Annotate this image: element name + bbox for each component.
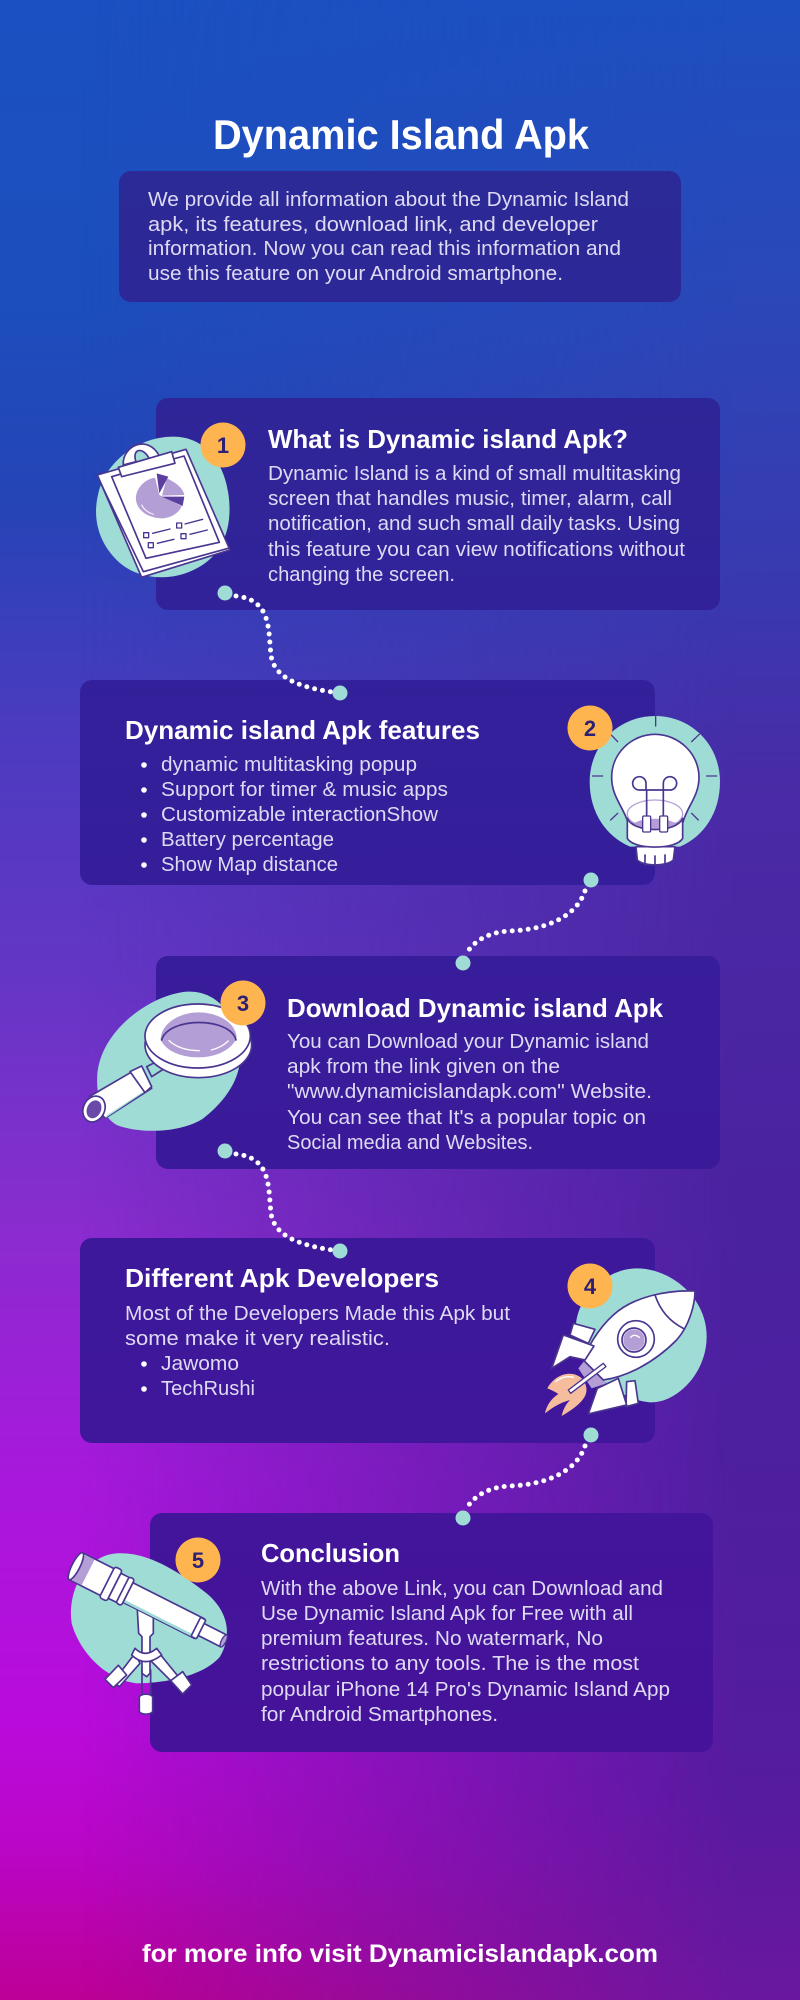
body: what is: notification, and such small daily tasks. Using	[268, 513, 680, 535]
badge: 2: 2	[584, 716, 596, 741]
body: developers: Most of the Developers Made this Apk but	[125, 1303, 510, 1325]
badge: 1	[200, 422, 246, 468]
body: download: Social media and Websites.	[287, 1132, 533, 1154]
badge: 2	[568, 706, 612, 750]
badge: 5	[176, 1538, 220, 1582]
intro text: information. Now you can read this information and	[148, 238, 621, 260]
connector: step 1 to 2	[218, 586, 348, 700]
panel: download	[156, 956, 720, 1169]
connector: step 3 to 4	[218, 1144, 348, 1258]
heading: developers: Different Apk Developers	[125, 1263, 439, 1293]
body: download: apk from the link given on the	[287, 1056, 560, 1078]
body: conclusion: With the above Link, you can Download and	[261, 1578, 663, 1600]
body: conclusion: restrictions to any tools. The is the most	[261, 1653, 639, 1675]
icon: rocket	[545, 1268, 707, 1416]
body: download	[287, 1031, 652, 1154]
body: conclusion	[261, 1578, 670, 1726]
intro text	[148, 189, 629, 285]
body: what is: changing the screen.	[268, 564, 455, 586]
heading: what is: What is Dynamic island Apk?	[268, 424, 628, 454]
feature list: Battery percentage	[161, 829, 334, 851]
icon: light bulb	[590, 716, 720, 865]
badge: 3	[220, 980, 266, 1026]
body: download: You can Download your Dynamic island	[287, 1031, 649, 1053]
body: developers	[125, 1303, 510, 1400]
badge: 4	[568, 1264, 612, 1308]
badge: 4: 4	[584, 1274, 597, 1299]
connector: step 4 to 5	[456, 1428, 598, 1526]
feature list: Customizable interactionShow	[161, 804, 439, 826]
body: what is	[268, 463, 685, 586]
heading: features: Dynamic island Apk features	[125, 715, 480, 745]
connector: step 2 to 3	[456, 872, 598, 970]
badge: 5: 5	[192, 1548, 204, 1573]
panel: features	[80, 680, 655, 885]
intro text: apk, its features, download link, and developer	[148, 214, 598, 236]
body: conclusion: premium features. No watermark, No	[261, 1628, 603, 1650]
body: conclusion: Use Dynamic Island Apk for Free with all	[261, 1603, 633, 1625]
body: what is: Dynamic Island is a kind of small multitasking	[268, 463, 681, 485]
intro text: We provide all information about the Dynamic Island	[148, 189, 629, 211]
intro text: use this feature on your Android smartphone.	[148, 263, 563, 285]
body: download: "www.dynamicislandapk.com" Website.	[287, 1081, 652, 1103]
body: download: You can see that It's a popular topic on	[287, 1107, 646, 1129]
panel: what is	[156, 398, 720, 610]
body: conclusion: for Android Smartphones.	[261, 1704, 498, 1726]
body: what is: this feature you can view notifications without	[268, 539, 685, 561]
footer: for more info visit Dynamicislandapk.com	[142, 1940, 658, 1968]
body: conclusion: popular iPhone 14 Pro's Dynamic Island App	[261, 1679, 670, 1701]
icon: magnifying glass	[79, 992, 252, 1131]
panel: intro	[119, 171, 681, 302]
heading: conclusion: Conclusion	[261, 1538, 400, 1568]
feature list: Show Map distance	[161, 854, 338, 876]
panel: developers	[80, 1238, 655, 1443]
icon: clipboard report	[96, 437, 230, 577]
heading: download: Download Dynamic island Apk	[287, 993, 664, 1023]
body: developers: Jawomo	[161, 1353, 239, 1375]
badge: 1: 1	[217, 433, 229, 458]
body: what is: screen that handles music, timer, alarm, call	[268, 488, 672, 510]
feature list	[141, 754, 448, 876]
badge: 3: 3	[237, 991, 249, 1016]
body: developers: some make it very realistic.	[125, 1328, 390, 1350]
body: developers: TechRushi	[161, 1378, 255, 1400]
title: Dynamic Island Apk	[213, 111, 590, 158]
icon: telescope	[65, 1549, 234, 1714]
feature list: Support for timer & music apps	[161, 779, 448, 801]
feature list: dynamic multitasking popup	[161, 754, 417, 776]
panel: conclusion	[150, 1513, 713, 1752]
